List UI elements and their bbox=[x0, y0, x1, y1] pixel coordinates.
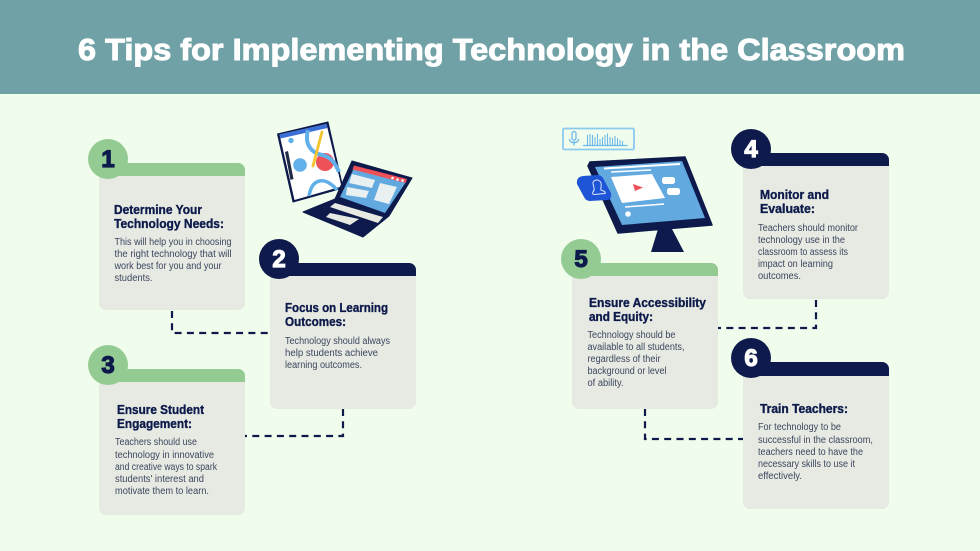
body: tip 5 bbox=[588, 330, 684, 389]
heading: tip 2 bbox=[285, 301, 388, 329]
icon: tablet bbox=[278, 122, 343, 202]
heading: tip 4 bbox=[760, 188, 829, 216]
panel: tip 2 bbox=[259, 239, 416, 409]
heading: tip 5: Ensure Accessibility bbox=[589, 296, 706, 310]
body: tip 6 bbox=[758, 422, 873, 482]
heading: tip 1: Determine Your bbox=[114, 203, 202, 217]
heading: tip 5 bbox=[589, 296, 706, 324]
body: tip 4: Teachers should monitor bbox=[758, 223, 859, 234]
heading: tip 4: Evaluate: bbox=[760, 202, 815, 216]
body: tip 3: technology in innovative bbox=[115, 450, 214, 461]
body: tip 3: students' interest and bbox=[115, 474, 204, 485]
body: tip 5: regardless of their bbox=[588, 354, 661, 365]
body: tip 2: help students achieve bbox=[285, 348, 378, 359]
icon: monitor stand bbox=[651, 229, 684, 252]
panel: tip 3 bbox=[88, 345, 245, 515]
body: tip 4: outcomes. bbox=[758, 271, 801, 282]
number 1: 1 bbox=[101, 146, 115, 173]
body: tip 4: classroom to assess its bbox=[758, 247, 848, 258]
icon: laptop bbox=[303, 161, 412, 237]
body: tip 3: and creative ways to spark bbox=[115, 462, 218, 473]
title: 6 Tips for Implementing Technology in the Classroom bbox=[78, 32, 905, 67]
heading: tip 3: Ensure Student bbox=[117, 403, 205, 417]
panel: tip 5 bbox=[561, 239, 718, 409]
icon: monitor with video bbox=[577, 157, 712, 252]
connector: tip 4 to tip 5 bbox=[718, 300, 816, 328]
connector: tip 5 to tip 6 bbox=[645, 409, 743, 439]
body: tip 5: of ability. bbox=[588, 378, 624, 389]
body: tip 6: For technology to be bbox=[758, 422, 841, 433]
body: tip 2: Technology should always bbox=[285, 336, 390, 347]
heading: tip 3: Engagement: bbox=[117, 417, 192, 431]
body: tip 1 bbox=[114, 237, 232, 284]
number 5: 5 bbox=[574, 246, 588, 273]
body: tip 5: Technology should be bbox=[588, 330, 676, 341]
number 4: 4 bbox=[744, 136, 758, 163]
panel: tip 4 bbox=[731, 129, 889, 299]
body: tip 4: technology use in the bbox=[758, 235, 845, 246]
connector: tip 1 to tip 2 bbox=[172, 311, 270, 333]
number 3: 3 bbox=[101, 352, 115, 379]
body: tip 4: impact on learning bbox=[758, 259, 833, 270]
body: tip 6: effectively. bbox=[758, 471, 802, 482]
panel: tip 6 bbox=[731, 338, 889, 509]
heading: tip 4: Monitor and bbox=[760, 188, 829, 202]
body: tip 2: learning outcomes. bbox=[285, 360, 362, 371]
heading: tip 2: Outcomes: bbox=[285, 315, 346, 329]
body: tip 6: successful in the classroom, bbox=[758, 435, 873, 446]
heading: tip 2: Focus on Learning bbox=[285, 301, 388, 315]
icon: tablet and laptop bbox=[278, 122, 412, 237]
header banner bbox=[0, 0, 980, 94]
number 2: 2 bbox=[272, 246, 286, 273]
heading: tip 5: and Equity: bbox=[589, 310, 653, 324]
connector: tip 2 to tip 3 bbox=[245, 409, 343, 436]
heading: tip 6: Train Teachers: bbox=[760, 402, 848, 416]
icon: audio waveform box bbox=[563, 128, 634, 150]
body: tip 1: work best for you and your bbox=[114, 261, 222, 272]
body: tip 3: motivate them to learn. bbox=[115, 486, 209, 497]
heading: tip 3 bbox=[117, 403, 205, 431]
panel: tip 1 bbox=[88, 139, 245, 310]
body: tip 6: teachers need to have the bbox=[758, 447, 863, 458]
body: tip 3: Teachers should use bbox=[115, 437, 197, 448]
body: tip 5: background or level bbox=[588, 366, 666, 377]
body: tip 2 bbox=[285, 336, 390, 371]
number 6: 6 bbox=[744, 345, 758, 372]
heading: tip 1 bbox=[114, 203, 224, 231]
body: tip 5: available to all students, bbox=[588, 342, 684, 353]
icon: user badge bbox=[577, 175, 611, 201]
body: tip 3 bbox=[115, 437, 218, 497]
body: tip 1: This will help you in choosing bbox=[114, 237, 232, 248]
body: tip 1: the right technology that will bbox=[114, 249, 232, 260]
body: tip 1: students. bbox=[114, 273, 152, 284]
body: tip 4 bbox=[758, 223, 859, 282]
body: tip 6: necessary skills to use it bbox=[758, 459, 855, 470]
heading: tip 1: Technology Needs: bbox=[114, 217, 224, 231]
